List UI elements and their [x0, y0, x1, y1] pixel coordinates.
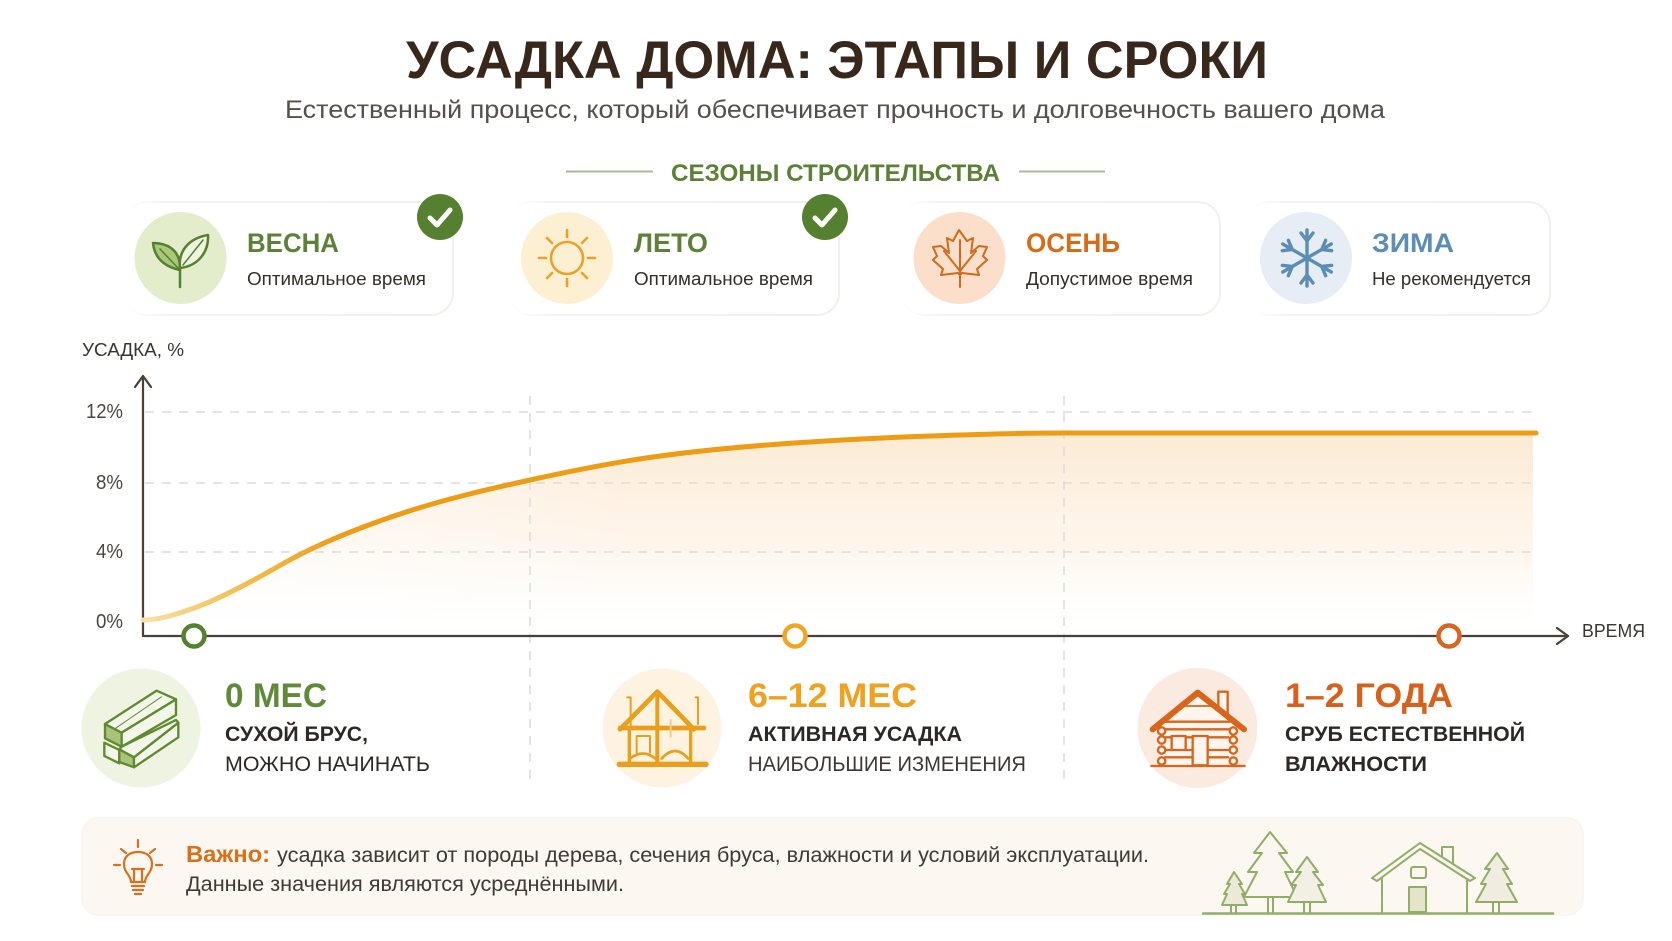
- curve line: [143, 433, 1536, 620]
- stage: 1-2 years: СРУБ ЕСТЕСТВЕННОЙ: [1285, 722, 1525, 746]
- stage: 6-12 months: НАИБОЛЬШИЕ ИЗМЕНЕНИЯ: [748, 753, 1026, 776]
- stage: 0 months: СУХОЙ БРУС,: [225, 722, 368, 746]
- stage: 0 months: [82, 668, 430, 788]
- panel: important note: Данные значения являются усреднёнными.: [186, 873, 624, 896]
- chart: shrinkage curve: [82, 340, 1645, 786]
- icon: log house: [1151, 692, 1245, 766]
- panel: winter card: [1248, 202, 1550, 315]
- icon: snowflake: [1280, 230, 1334, 286]
- panel: autumn card: ОСЕНЬ: [1026, 228, 1120, 258]
- panel: important note: [82, 818, 1583, 915]
- panel: summer card: ЛЕТО: [634, 228, 708, 258]
- y axis labels: 8%: [96, 472, 123, 494]
- y axis labels: 4%: [96, 541, 123, 563]
- stage: 1-2 years: 1–2 ГОДА: [1285, 677, 1453, 715]
- curve area fill: [143, 430, 1533, 636]
- subtitle: Естественный процесс, который обеспечивает прочность и долговечность вашего дома: [285, 96, 1385, 124]
- icon: trees and house landscape: [1203, 832, 1553, 914]
- icon: house frame: [619, 692, 706, 764]
- icon: sprout: [153, 235, 208, 287]
- stage: 6-12 months: 6–12 МЕС: [748, 677, 917, 715]
- panel: important note: Важно:: [186, 841, 270, 867]
- stage: 1-2 years: ВЛАЖНОСТИ: [1285, 753, 1427, 776]
- icon: check badge: [417, 194, 463, 240]
- panel: autumn card: [902, 202, 1220, 315]
- stage: 1-2 years: [1138, 668, 1525, 788]
- stage: 6-12 months: АКТИВНАЯ УСАДКА: [748, 723, 962, 746]
- panel: spring card: Оптимальное время: [247, 269, 426, 289]
- stage: 0 months: 0 МЕС: [225, 677, 327, 715]
- stage: 0 months: МОЖНО НАЧИНАТЬ: [225, 753, 430, 776]
- marker: 6-12 months: [784, 626, 806, 646]
- y axis labels: 12%: [86, 401, 123, 423]
- icon: sun: [539, 230, 595, 286]
- y axis title: УСАДКА, %: [82, 340, 184, 360]
- stage: 6-12 months: [602, 668, 1026, 788]
- icon: maple leaf: [933, 230, 987, 287]
- axes and arrows: [135, 376, 1568, 644]
- x axis title: ВРЕМЯ: [1582, 621, 1645, 641]
- panel: winter card: ЗИМА: [1372, 228, 1454, 258]
- section heading: seasons: СЕЗОНЫ СТРОИТЕЛЬСТВА: [671, 160, 1000, 187]
- marker: 0 months: [184, 626, 204, 646]
- icon: stacked timber: [104, 691, 178, 767]
- panel: important note: усадка зависит от породы дерева, сечения бруса, влажности и условий эксплуатации.: [277, 844, 1149, 867]
- panel: summer card: Оптимальное время: [634, 269, 813, 289]
- marker: 1-2 years: [1438, 626, 1460, 646]
- panel: autumn card: Допустимое время: [1026, 269, 1193, 289]
- icon: light bulb: [114, 840, 162, 894]
- title: УСАДКА ДОМА: ЭТАПЫ И СРОКИ: [406, 31, 1268, 90]
- panel: winter card: Не рекомендуется: [1372, 269, 1531, 289]
- panel: spring card: ВЕСНА: [247, 228, 339, 258]
- y axis labels: 0%: [96, 611, 123, 633]
- icon: check badge: [802, 194, 848, 240]
- panel: spring card: [125, 194, 463, 315]
- y axis labels: [86, 401, 123, 633]
- panel: summer card: [510, 194, 848, 315]
